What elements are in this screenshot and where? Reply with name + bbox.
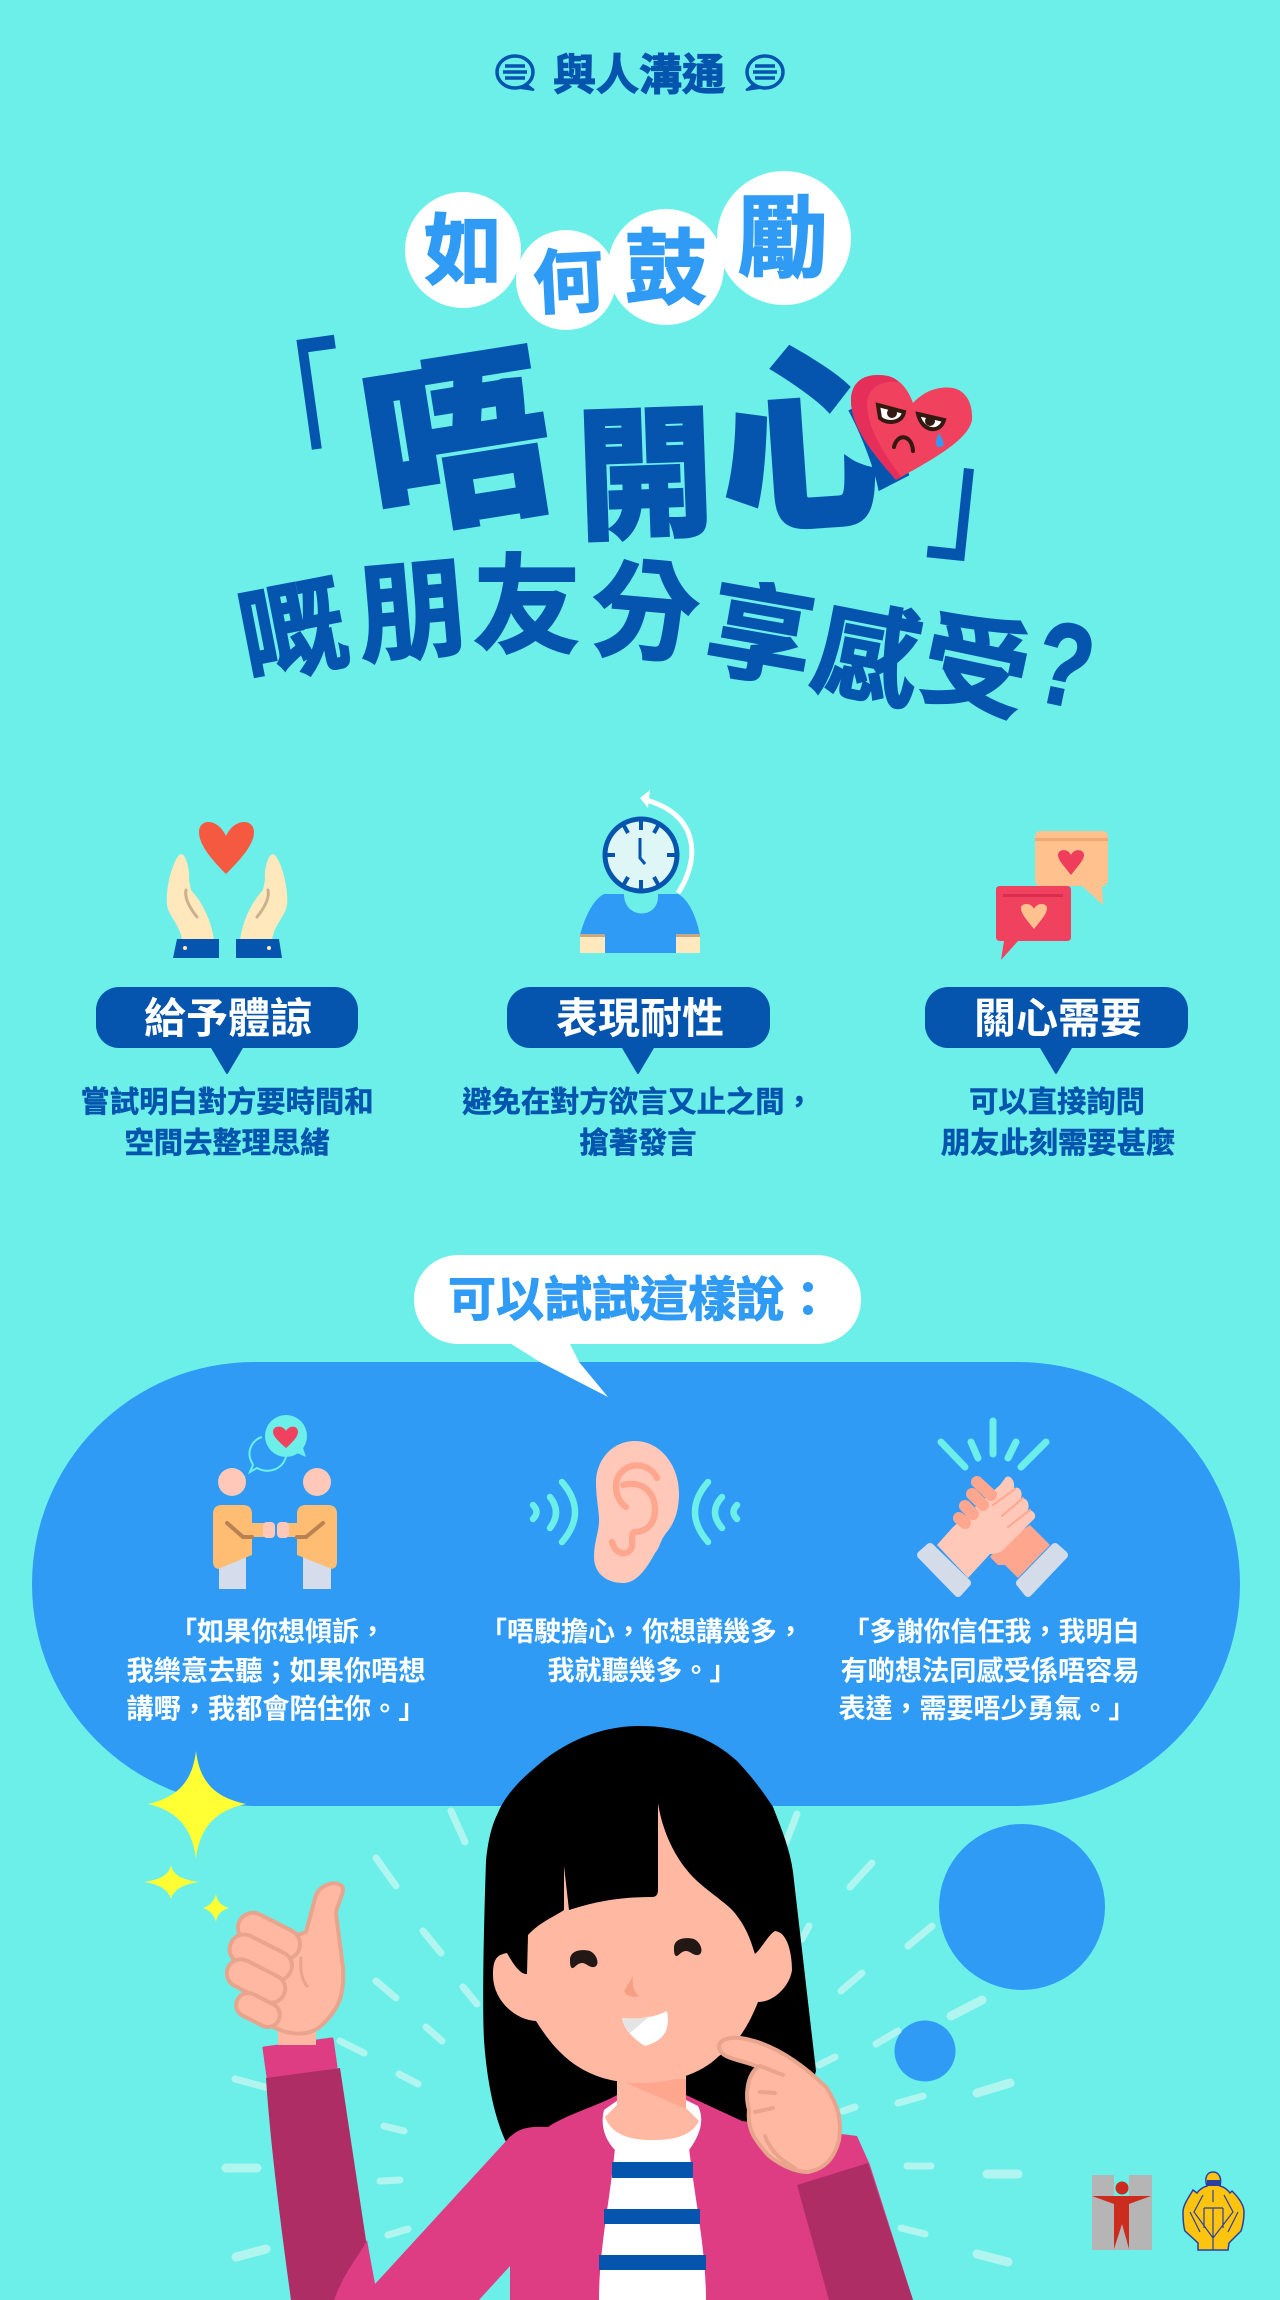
panel: 給予體諒 <box>81 822 373 1160</box>
icon: two chat bubbles with hearts <box>996 831 1108 960</box>
description: 給予體諒: 空間去整理思緒 <box>124 1127 330 1160</box>
panel: quote 3 <box>838 1421 1140 1724</box>
title bubbles: 如何鼓勵: 鼓 <box>625 224 707 315</box>
title bubbles: 如何鼓勵: 如 <box>424 207 502 295</box>
quote text 3: 表達，需要唔少勇氣。」 <box>838 1694 1136 1724</box>
label pill: 表現耐性: 表現耐性 <box>556 995 724 1042</box>
collar and neck <box>603 2075 701 2150</box>
logo: hands holding person <box>1183 2172 1244 2250</box>
description: 關心需要 <box>941 1086 1175 1160</box>
label pill: 給予體諒 <box>96 987 358 1073</box>
description: 表現耐性: 避免在對方欲言又止之間， <box>462 1086 814 1119</box>
title bubbles: 如何鼓勵 <box>405 171 851 330</box>
speech bubble heading: 可以試試這樣說： <box>414 1255 861 1397</box>
icon: hands holding heart <box>167 822 287 958</box>
sparkles <box>144 1751 246 1922</box>
description: 表現耐性 <box>462 1086 814 1160</box>
icon: left chat bubble <box>497 56 534 90</box>
quote text 1: 我樂意去聽；如果你唔想 <box>126 1655 426 1686</box>
label pill: 給予體諒: 給予體諒 <box>144 995 312 1042</box>
illustration: girl giving thumbs up <box>222 1726 913 2300</box>
description: 關心需要: 朋友此刻需要甚麼 <box>941 1127 1175 1160</box>
label pill: 關心需要: 關心需要 <box>974 995 1142 1042</box>
face <box>493 1803 792 2083</box>
title line: 嘅朋友分享感受？: 感 <box>804 589 930 725</box>
jacket <box>334 2095 913 2300</box>
logo: social welfare department figure <box>1092 2175 1152 2250</box>
hair <box>483 1726 816 2170</box>
blue panel background <box>32 1362 1240 1806</box>
panel: 關心需要 <box>925 831 1188 1160</box>
icon: ear with sound waves <box>533 1441 737 1583</box>
quote text 1 <box>126 1617 426 1724</box>
quote text 3: 「多謝你信任我，我明白 <box>842 1617 1140 1647</box>
icon: two people fist bump with heart bubble <box>213 1415 337 1589</box>
title line: 嘅朋友分享感受？: 朋 <box>353 548 471 678</box>
hand: thumbs up <box>222 1883 343 2045</box>
title line: 嘅朋友分享感受？: 享 <box>698 569 823 704</box>
description: 給予體諒 <box>81 1086 373 1160</box>
title line: 嘅朋友分享感受？: 嘅 <box>230 565 356 701</box>
quote text 3: 有啲想法同感受係唔容易 <box>840 1655 1140 1686</box>
icon: crying heart <box>851 375 972 480</box>
panel: 表現耐性 <box>462 790 814 1160</box>
title line: 嘅朋友分享感受？: 友 <box>473 546 581 667</box>
description: 關心需要: 可以直接詢問 <box>969 1086 1145 1119</box>
icon: clock head person <box>580 790 700 953</box>
left sleeve cuff <box>264 2039 336 2077</box>
confetti dashes <box>226 1811 1018 2262</box>
dark right sleeve <box>797 2163 913 2300</box>
title line: 嘅朋友分享感受？: ? <box>1024 596 1105 735</box>
section heading: 與人溝通: 與人溝通 <box>553 52 725 100</box>
quote text 3 <box>838 1617 1140 1724</box>
nose <box>624 1976 639 1997</box>
quote text 2: 「唔駛擔心，你想講幾多， <box>480 1617 804 1647</box>
panel: quote 2 <box>480 1441 804 1686</box>
quote text 2 <box>480 1617 804 1686</box>
main title: 「唔開心」: 開 <box>575 396 716 558</box>
icon: clasped hands <box>921 1421 1064 1593</box>
quote text 1: 講嘢，我都會陪住你。」 <box>126 1693 426 1724</box>
section heading: 與人溝通 <box>497 52 783 100</box>
main title: 「唔開心」: 唔 <box>351 330 566 562</box>
title bubbles: 如何鼓勵: 何 <box>531 242 605 324</box>
main title: 「唔開心」 <box>222 327 1052 586</box>
speech bubble heading: 可以試試這樣說：: 可以試試這樣說： <box>448 1274 832 1327</box>
description: 表現耐性: 搶著發言 <box>579 1127 697 1160</box>
main title: 「唔開心」: 心 <box>714 330 913 557</box>
title bubbles: 如何鼓勵: 勵 <box>738 190 828 290</box>
left sleeve <box>266 2068 375 2300</box>
hand: finger on chin <box>719 2038 840 2172</box>
label pill: 表現耐性 <box>507 987 770 1073</box>
quote text 1: 「如果你想傾訴， <box>170 1617 386 1647</box>
quote text 2: 我就聽幾多。」 <box>548 1656 736 1686</box>
icon: right chat bubble <box>746 56 783 90</box>
main title: 「唔開心」: 」 <box>922 419 1052 586</box>
panel: quote 1 <box>126 1415 426 1724</box>
striped shirt <box>599 2148 706 2300</box>
title line: 嘅朋友分享感受？: 分 <box>586 548 704 678</box>
title line: 嘅朋友分享感受？ <box>230 546 1105 737</box>
label pill: 關心需要 <box>925 987 1188 1073</box>
decorative circles <box>894 1824 1105 2082</box>
mouth <box>622 2011 668 2046</box>
eyes <box>570 1938 701 1968</box>
main title: 「唔開心」: 「 <box>222 327 362 528</box>
description: 給予體諒: 嘗試明白對方要時間和 <box>81 1086 373 1119</box>
title line: 嘅朋友分享感受？: 受 <box>911 599 1040 737</box>
